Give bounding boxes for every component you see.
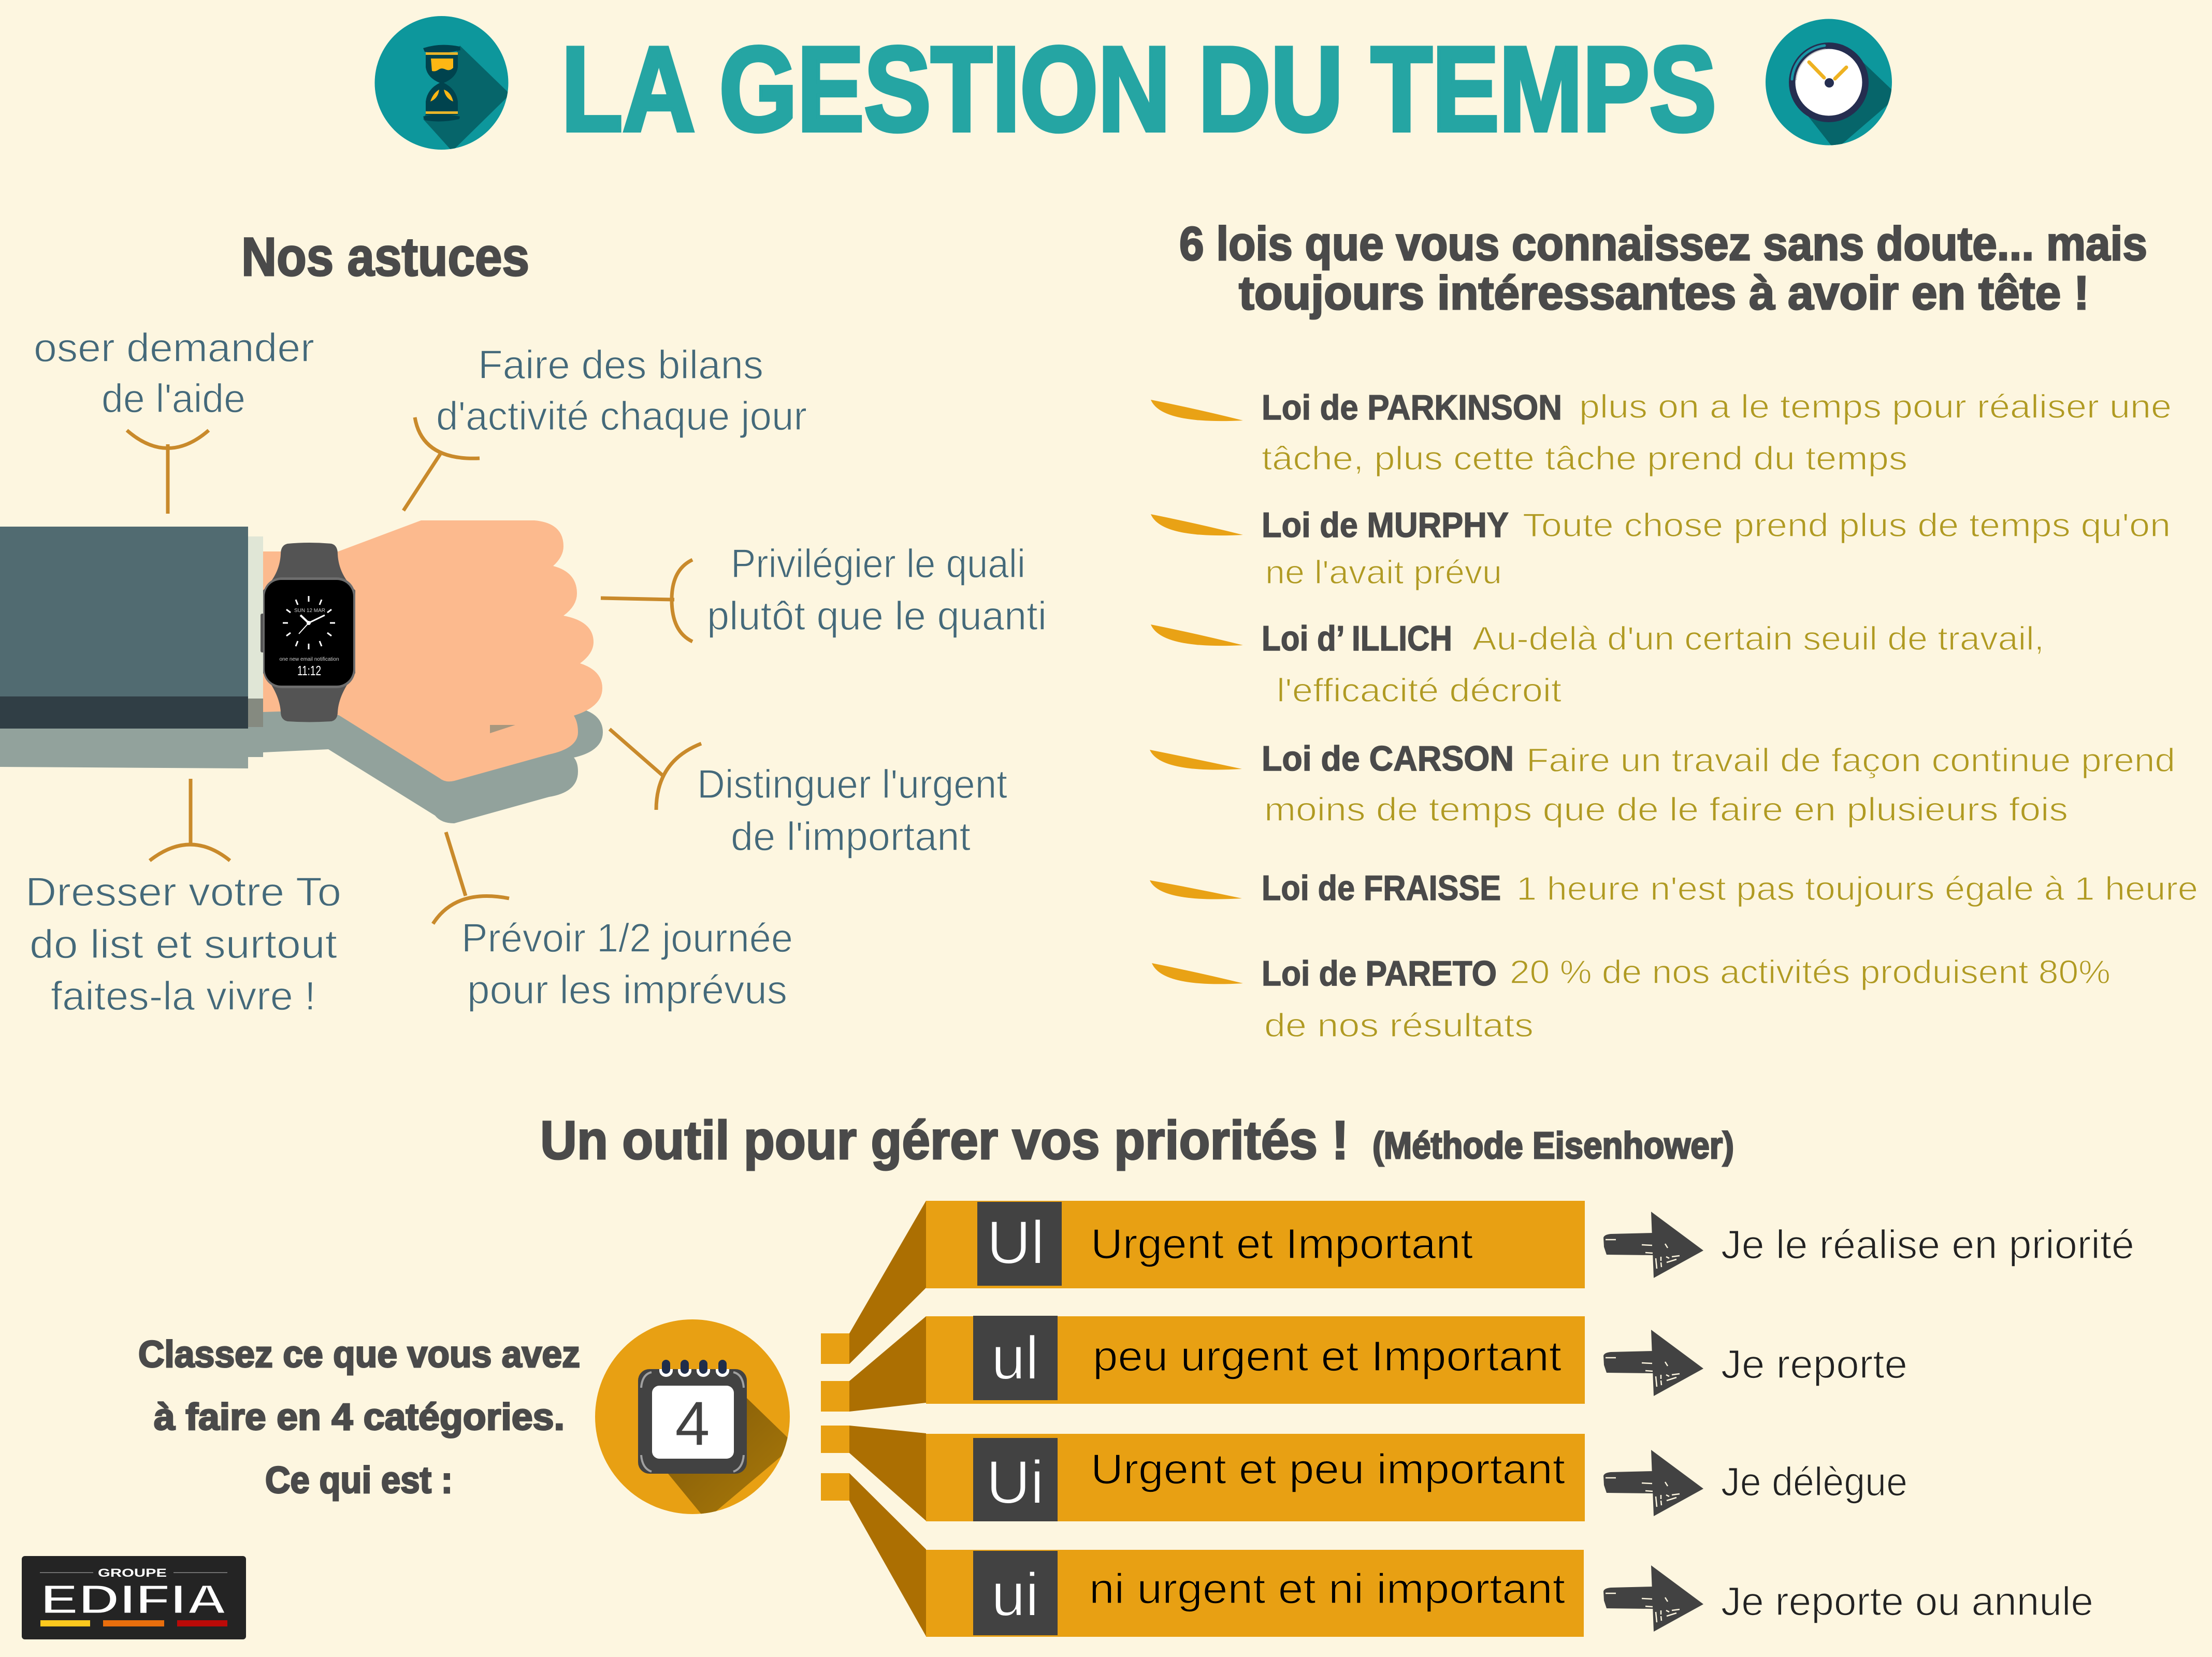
result 1: Je le réalise en priorité	[1721, 1222, 2134, 1267]
law: Carson: Loi de CARSON	[1262, 739, 1514, 778]
law: Pareto: Loi de PARETO	[1262, 954, 1497, 993]
heading: 6 lois: 6 lois que vous connaissez sans doute... mais	[1179, 217, 2147, 270]
logo: groupe edifia: EDIFIA	[40, 1576, 227, 1622]
ribbon 1: urgent et important: Ul	[987, 1209, 1045, 1277]
law: Illich	[1151, 619, 2044, 709]
icon: smartwatch: SUN 12 MAR	[294, 608, 325, 614]
ribbon 2: peu urgent et important: peu urgent et Important	[1093, 1333, 1562, 1380]
tip: oser demander: de l'aide	[102, 375, 245, 421]
tip: distinguer urgent	[697, 761, 1007, 859]
law: Illich: Au-delà d'un certain seuil de travail,	[1472, 620, 2044, 657]
tip: imprevus: pour les imprévus	[467, 967, 787, 1012]
law: Parkinson: plus on a le temps pour réaliser une	[1579, 388, 2172, 425]
law: Murphy	[1151, 505, 2171, 591]
law: Pareto: 20 % de nos activités produisent 80%	[1510, 953, 2110, 991]
arrow 1	[1603, 1212, 1703, 1278]
logo: groupe edifia	[22, 1556, 246, 1639]
tip: distinguer urgent: de l'important	[731, 813, 971, 859]
arrow 4	[1603, 1565, 1703, 1632]
ribbon 4: ni urgent ni important: ui	[991, 1561, 1039, 1629]
tip: faire des bilans	[436, 342, 807, 439]
ribbon 2: peu urgent et important: ul	[991, 1324, 1039, 1392]
text: classez: à faire en 4 catégories.	[154, 1397, 565, 1438]
ribbon 4: ni urgent ni important: ni urgent et ni important	[1089, 1565, 1565, 1612]
result 2: Je reporte	[1721, 1341, 1907, 1387]
panel: priorites	[138, 1110, 2134, 1637]
tip: distinguer urgent: Distinguer l'urgent	[697, 761, 1007, 807]
tip: privilegier le quali	[707, 541, 1047, 638]
ribbon 1: urgent et important: Urgent et Important	[1091, 1220, 1473, 1268]
logo: groupe edifia: GROUPE	[98, 1566, 167, 1579]
title: LA GESTION DU TEMPS	[561, 22, 1716, 156]
heading: un outil: Un outil pour gérer vos priorités !	[540, 1110, 1349, 1171]
result 3: Je délègue	[1721, 1459, 1907, 1504]
law: Murphy: Loi de MURPHY	[1262, 505, 1509, 545]
text: classez	[138, 1334, 580, 1501]
law: Illich: Loi d’ ILLICH	[1262, 619, 1452, 658]
panel: nos astuces	[0, 227, 1047, 1019]
heading: un outil: (Méthode Eisenhower)	[1372, 1125, 1734, 1167]
ribbon 3: urgent et peu important	[821, 1426, 1585, 1521]
illustration: arm and watch	[0, 520, 603, 823]
law: Carson: Faire un travail de façon continue prend	[1526, 742, 2175, 779]
icon: clock	[1766, 19, 1898, 150]
law: Parkinson: Loi de PARKINSON	[1262, 388, 1562, 427]
ribbon 1: urgent et important	[821, 1201, 1585, 1364]
heading: 6 lois: toujours intéressantes à avoir en tête !	[1239, 267, 2089, 319]
arrow 2	[1603, 1330, 1703, 1396]
panel: 6 lois	[1150, 217, 2198, 1044]
icon: smartwatch: one new email notification	[279, 657, 339, 662]
ribbon 3: urgent et peu important: Ui	[986, 1448, 1044, 1517]
heading: nos astuces: Nos astuces	[241, 227, 529, 287]
icon: hourglass	[375, 16, 510, 151]
icon: smartwatch: 11:12	[297, 663, 321, 678]
icon: smartwatch	[261, 543, 355, 722]
text: classez: Ce qui est :	[265, 1460, 453, 1501]
tip: to do list: faites-la vivre !	[51, 973, 316, 1019]
tip: faire des bilans: Faire des bilans	[478, 342, 763, 387]
ribbon 2: peu urgent et important	[821, 1316, 1585, 1412]
tip: oser demander: oser demander	[34, 325, 314, 370]
ribbon 4: ni urgent ni important	[821, 1473, 1584, 1637]
ribbon 3: urgent et peu important: Urgent et peu important	[1091, 1446, 1565, 1493]
tip: privilegier le quali: Privilégier le quali	[731, 541, 1025, 586]
tip: to do list: do list et surtout	[30, 921, 337, 967]
tip: privilegier le quali: plutôt que le quanti	[707, 593, 1047, 638]
law: Fraisse	[1150, 868, 2198, 908]
law: Pareto: de nos résultats	[1264, 1007, 1534, 1044]
law: Carson	[1150, 739, 2175, 828]
tip: to do list	[25, 869, 341, 1019]
icon: calendar 4: 4	[675, 1389, 710, 1458]
law: Parkinson	[1151, 388, 2172, 477]
result 4: Je reporte ou annule	[1721, 1578, 2093, 1624]
law: Carson: moins de temps que de le faire en plusieurs fois	[1264, 791, 2068, 828]
law: Fraisse: 1 heure n'est pas toujours égale à 1 heure	[1516, 870, 2198, 907]
icon: calendar 4	[595, 1319, 795, 1520]
law: Illich: l'efficacité décroit	[1277, 672, 1562, 709]
law: Murphy: Toute chose prend plus de temps qu'on	[1523, 506, 2171, 544]
arrow 3	[1603, 1450, 1703, 1516]
law: Parkinson: tâche, plus cette tâche prend du temps	[1262, 440, 1907, 477]
tip: faire des bilans: d'activité chaque jour	[436, 393, 807, 439]
law: Fraisse: Loi de FRAISSE	[1262, 868, 1501, 908]
tip: oser demander	[34, 325, 314, 421]
law: Pareto	[1152, 953, 2110, 1044]
tip: imprevus	[461, 915, 793, 1012]
text: classez: Classez ce que vous avez	[138, 1334, 580, 1375]
heading: 6 lois	[1179, 217, 2147, 319]
callout brackets	[127, 417, 701, 924]
tip: to do list: Dresser votre To	[25, 869, 341, 914]
tip: imprevus: Prévoir 1/2 journée	[461, 915, 793, 961]
law: Murphy: ne l'avait prévu	[1265, 554, 1502, 591]
